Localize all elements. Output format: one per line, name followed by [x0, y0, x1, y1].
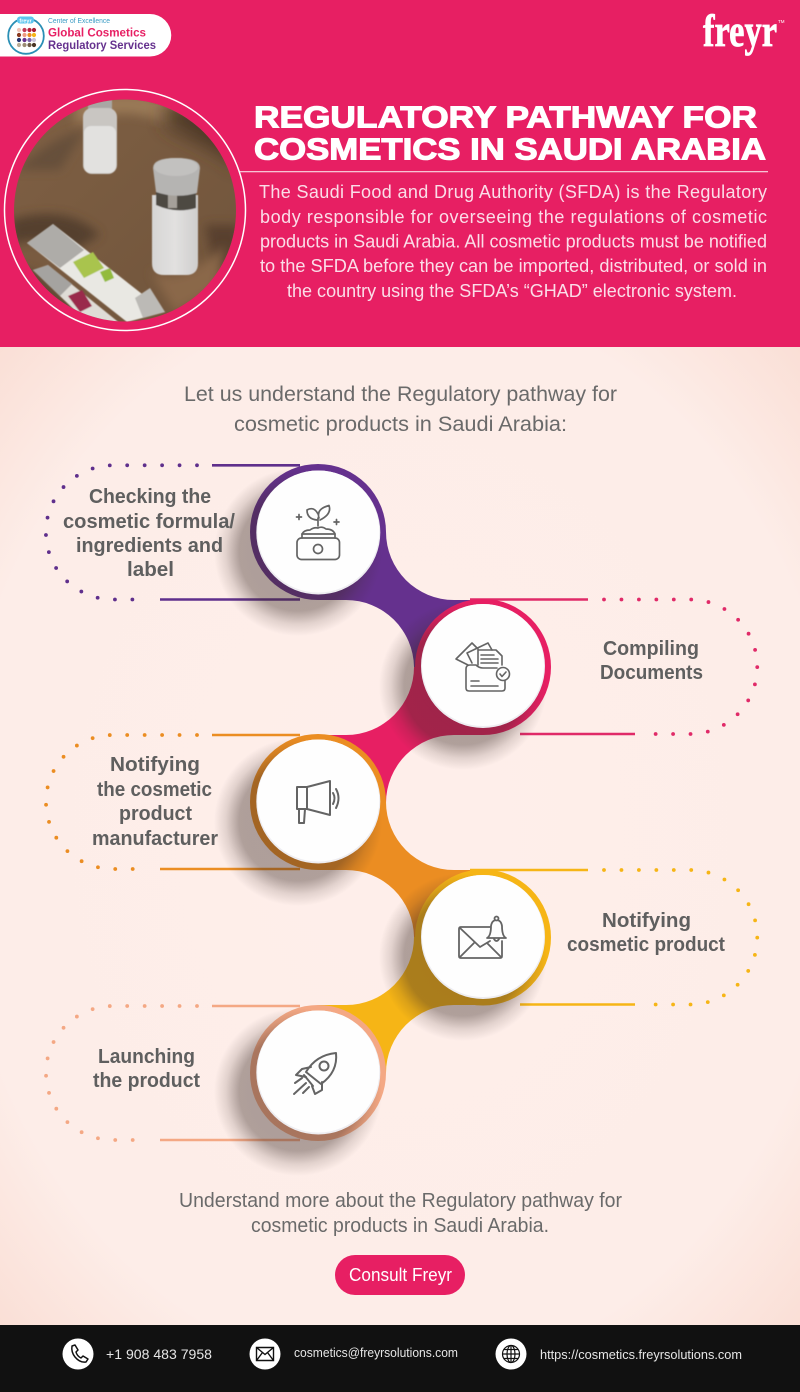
intro paragraph: to the SFDA before they can be imported, distributed, or sold in [260, 256, 767, 276]
phone contact: +1 908 483 7958 [106, 1347, 212, 1362]
step 3 node [214, 734, 386, 906]
button: Consult Freyr [335, 1255, 465, 1295]
step 2 label: Compiling [603, 638, 699, 660]
phone contact [62, 1338, 212, 1370]
closing text: Understand more about the Regulatory pathway for [179, 1190, 622, 1212]
small dropper bottle [83, 99, 117, 174]
step 4 node [379, 870, 551, 1041]
step 1 label: ingredients and [76, 535, 223, 557]
step 4 outline: yellow [470, 870, 757, 1004]
step 5 outline: peach [46, 1006, 300, 1140]
intro paragraph: products in Saudi Arabia. All cosmetic products must be notified [260, 232, 767, 252]
header panel [0, 0, 800, 347]
lower background panel [0, 347, 800, 1325]
step 3 label [92, 754, 218, 850]
icon: document folder with check [456, 643, 510, 691]
step 2 outline: pink [470, 600, 757, 734]
step 5 label [93, 1046, 200, 1092]
header divider line [240, 171, 768, 172]
freyr logo: freyr [703, 5, 777, 56]
step 3 label: product [119, 803, 192, 825]
step connectors [318, 532, 483, 1073]
website contact [496, 1338, 742, 1370]
section intro text: Let us understand the Regulatory pathway for [184, 382, 617, 406]
step 5 label: the product [93, 1070, 200, 1092]
email contact: cosmetics@freyrsolutions.com [294, 1345, 458, 1360]
step 4 label [567, 910, 725, 956]
icon: envelope with bell [459, 916, 506, 958]
website contact: https://cosmetics.freyrsolutions.com [540, 1347, 742, 1362]
step 4 label: cosmetic product [567, 934, 725, 956]
title: REGULATORY PATHWAY FOR [254, 100, 757, 134]
badge: Global Cosmetics Regulatory Services: Regulatory Services [48, 40, 156, 52]
step 1 outline: purple [46, 465, 300, 600]
footer bar [0, 1325, 800, 1392]
badge: Global Cosmetics Regulatory Services: Global Cosmetics [48, 28, 146, 40]
step 1 label: Checking the [89, 486, 211, 508]
section intro text [184, 382, 617, 436]
cream tubes [27, 224, 165, 325]
icon: phone [72, 1345, 88, 1362]
step 3 label: Notifying [110, 754, 200, 776]
badge: Global Cosmetics Regulatory Services: freyr [19, 18, 32, 24]
photo of cosmetic products in a circle [4, 90, 246, 330]
title [254, 100, 766, 166]
icon: rocket [294, 1053, 336, 1094]
badge: Global Cosmetics Regulatory Services: Center of Excellence [48, 18, 110, 25]
step 5 node [214, 1005, 386, 1176]
step 2 label [600, 638, 703, 684]
freyr logo: TM [778, 19, 785, 24]
button: Consult Freyr: Consult Freyr [349, 1265, 452, 1285]
title: COSMETICS IN SAUDI ARABIA [254, 132, 766, 166]
intro paragraph: body responsible for overseeing the regulations of cosmetic [260, 207, 767, 227]
step 3 label: manufacturer [92, 828, 218, 850]
step 1 node [214, 464, 386, 636]
step 3 outline: orange [46, 735, 300, 869]
step 5 label: Launching [98, 1046, 195, 1068]
icon: cream jar with sprout [296, 506, 340, 560]
icon: globe [502, 1346, 520, 1362]
step 3 label: the cosmetic [97, 779, 212, 801]
step 1 label: cosmetic formula/ [63, 511, 235, 533]
icon: envelope [256, 1348, 274, 1360]
section intro text: cosmetic products in Saudi Arabia: [234, 412, 567, 436]
step 2 node [379, 599, 551, 770]
step 2 label: Documents [600, 662, 703, 684]
step 1 label [63, 486, 235, 581]
intro paragraph [259, 182, 767, 301]
badge: Global Cosmetics Regulatory Services [0, 14, 171, 57]
intro paragraph: the country using the SFDA’s “GHAD” electronic system. [287, 281, 737, 301]
step 1 label: label [127, 559, 174, 581]
icon: megaphone [297, 781, 338, 823]
step 4 label: Notifying [602, 910, 691, 932]
intro paragraph: The Saudi Food and Drug Authority (SFDA) is the Regulatory [259, 182, 767, 202]
closing text: cosmetic products in Saudi Arabia. [251, 1215, 549, 1237]
tall white bottle [152, 158, 200, 275]
email contact [250, 1338, 458, 1370]
closing text [179, 1190, 622, 1237]
